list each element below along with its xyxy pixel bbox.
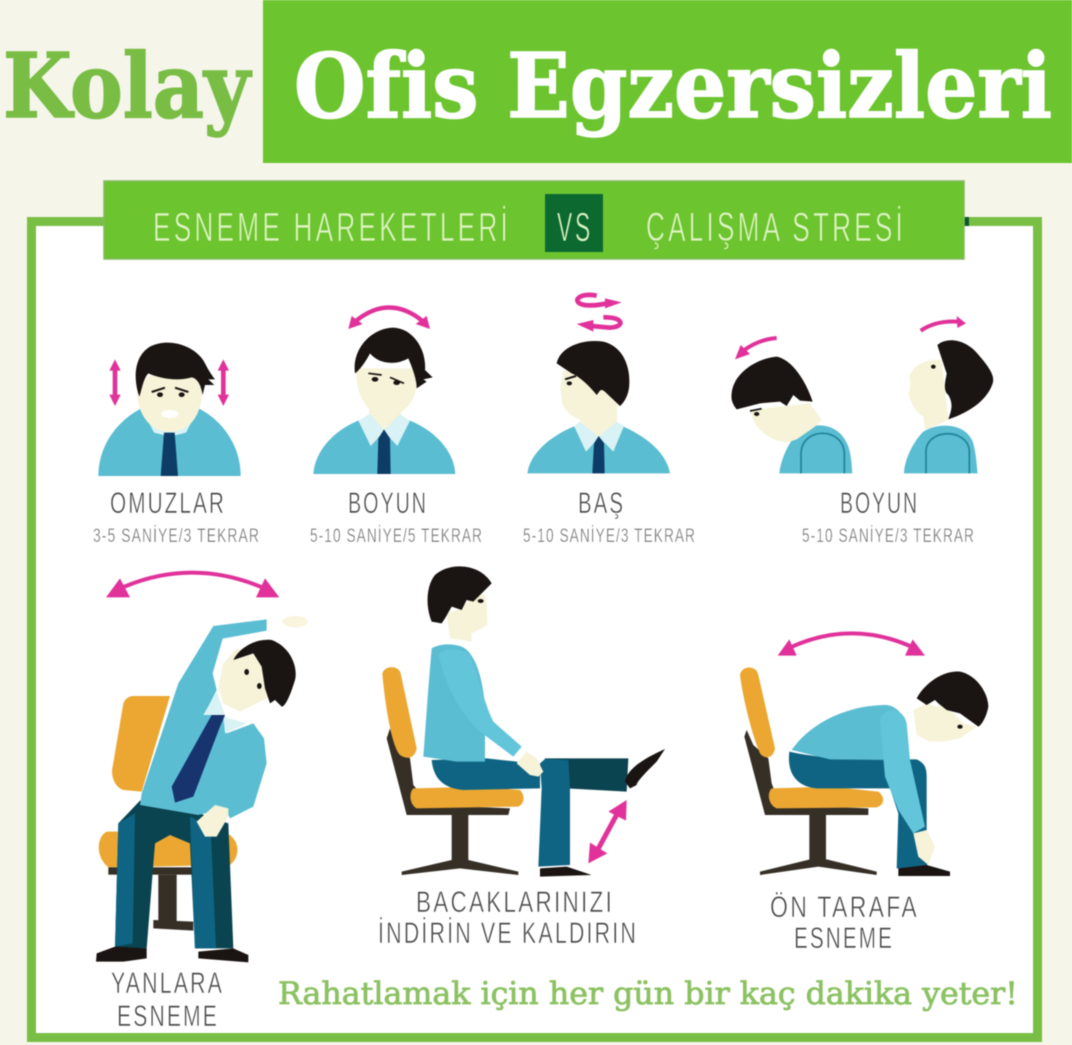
- label: shoulders: [93, 487, 260, 547]
- label: neck 1: BOYUN: [348, 487, 428, 520]
- arrow: forward bend arc: [778, 633, 925, 656]
- banner: subtitle strip: ESNEME HAREKETLERİ: [153, 204, 511, 250]
- label: neck 2: BOYUN: [840, 487, 919, 520]
- figure: neck side-tilt bust: [313, 328, 455, 474]
- chair: orange and dark: [99, 696, 237, 931]
- chair: seat and back: [740, 667, 883, 875]
- title: Kolay: Kolay: [3, 33, 252, 138]
- tagline: Rahatlamak için her gün bir kaç dakika yeter!: [278, 976, 1018, 1012]
- label: leg raise: [378, 886, 638, 950]
- arrow: neck tilt arc: [348, 307, 430, 329]
- label: leg raise: BACAKLARINIZI: [416, 886, 614, 919]
- banner: subtitle strip: [104, 181, 969, 259]
- figure: head turn bust: [527, 341, 670, 473]
- label: head: 5-10 SANİYE/3 TEKRAR: [523, 526, 696, 547]
- exercise: forward bend figure: [740, 633, 988, 876]
- arrow: head rotation top: [577, 295, 622, 308]
- figure: bent person: [789, 671, 988, 876]
- figure: shoulders bust: [98, 343, 241, 476]
- label: forward bend: [770, 891, 919, 955]
- label: head: BAŞ: [578, 487, 625, 520]
- label: neck 1: 5-10 SANİYE/5 TEKRAR: [310, 526, 483, 547]
- figure: torso and raised arm: [140, 616, 308, 837]
- arrow: leg raise: [588, 800, 627, 863]
- figure: neck backward bend: [904, 340, 993, 473]
- label: forward bend: ÖN TARAFA: [770, 891, 919, 924]
- label: side stretch: YANLARA: [111, 967, 224, 1000]
- label: leg raise: İNDİRİN VE KALDIRIN: [378, 917, 638, 950]
- label: side stretch: [111, 967, 224, 1033]
- arrow: side stretch arc: [106, 573, 279, 597]
- banner: subtitle strip: VS: [557, 204, 593, 250]
- arrow: head rotation bottom: [577, 317, 620, 332]
- label: forward bend: ESNEME: [794, 922, 894, 955]
- figure: neck forward bend: [731, 357, 852, 473]
- title panel: green header block: [263, 0, 1072, 163]
- figure: legs: [96, 801, 248, 962]
- arrow: left shoulder up-down: [109, 359, 121, 406]
- label: neck 2: [802, 487, 975, 547]
- label: neck 1: [310, 487, 483, 547]
- exercise: head and neck busts: [527, 295, 993, 473]
- exercise: shoulders and neck busts: [98, 307, 455, 476]
- label: shoulders: 3-5 SANİYE/3 TEKRAR: [93, 526, 260, 547]
- label: neck 2: 5-10 SANİYE/3 TEKRAR: [802, 526, 975, 547]
- chair: seat and back: [382, 667, 524, 875]
- label: side stretch: ESNEME: [117, 1000, 219, 1033]
- exercise: leg raise figure: [382, 566, 665, 877]
- label: shoulders: OMUZLAR: [110, 487, 226, 520]
- arrow: neck forward: [735, 338, 777, 359]
- banner: subtitle strip: ÇALIŞMA STRESİ: [646, 204, 906, 250]
- figure: seated person with raised leg: [423, 566, 665, 877]
- arrow: neck backward: [921, 316, 966, 331]
- panel: main white frame: [32, 222, 1038, 1038]
- label: head: [523, 487, 696, 547]
- arrow: right shoulder up-down: [218, 359, 229, 406]
- exercise: side stretch figure: [96, 573, 308, 962]
